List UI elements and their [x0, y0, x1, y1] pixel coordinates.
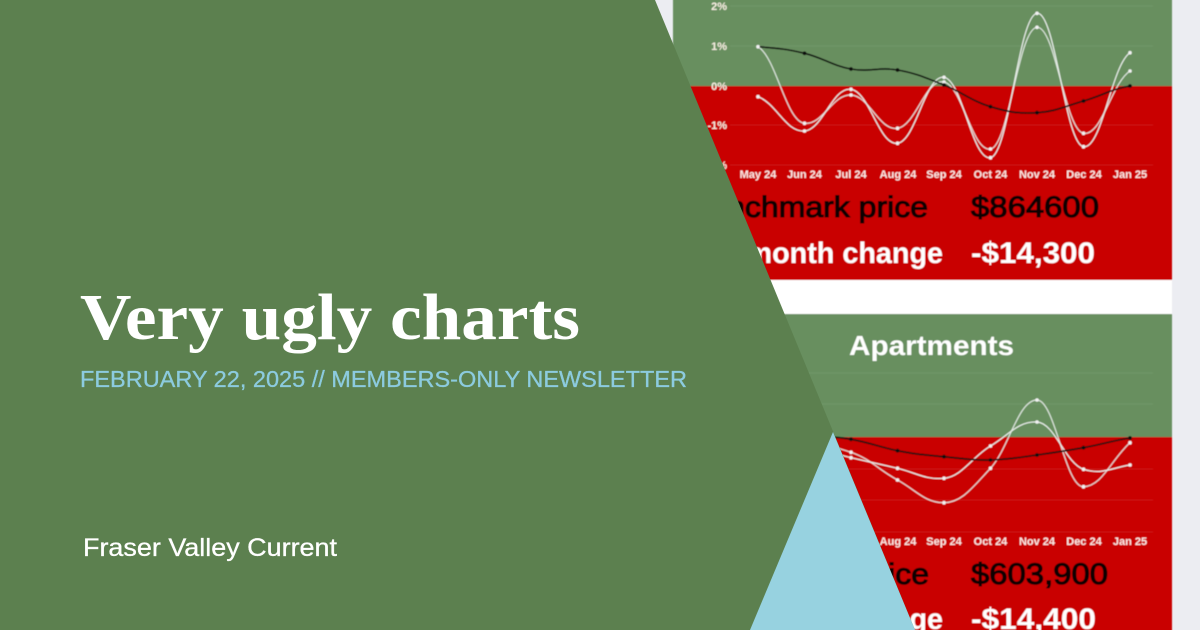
x axis labels: Oct 24 [974, 169, 1008, 181]
x axis labels: Oct 24 [974, 536, 1008, 548]
x axis labels: Dec 24 [1066, 169, 1103, 181]
panel: screenshot of chart cards [673, 0, 1172, 630]
y axis labels: 1% [711, 41, 727, 53]
panel: apartments chart card [673, 314, 1172, 630]
benchmark price row [689, 558, 1108, 591]
y axis labels: 0% [711, 81, 727, 93]
x axis labels: Jun 24 [787, 169, 823, 181]
benchmark price row: $864600 [971, 191, 1099, 224]
x axis labels: Nov 24 [1019, 536, 1056, 548]
x axis labels: Nov 24 [1019, 169, 1056, 181]
month change row [721, 603, 1096, 630]
x axis labels: Aug 24 [880, 536, 917, 548]
benchmark price row [688, 191, 1099, 224]
line chart: top [756, 12, 1132, 160]
y axis labels [707, 1, 727, 172]
x axis labels: May 24 [740, 169, 777, 181]
benchmark price row: Benchmark price [688, 191, 928, 224]
y axis labels: 2% [711, 1, 727, 13]
title: Very ugly charts [80, 281, 580, 354]
heading: Apartments: Apartments [849, 330, 1014, 361]
x axis labels: Dec 24 [1066, 536, 1103, 548]
brand name: Fraser Valley Current [83, 534, 337, 562]
x axis labels: Sep 24 [926, 536, 963, 548]
x axis labels: Sep 24 [926, 169, 963, 181]
x axis labels [880, 536, 1147, 548]
x axis labels: Aug 24 [880, 169, 917, 181]
x axis labels: Jan 25 [1113, 169, 1147, 181]
y axis labels: -1% [707, 120, 727, 132]
line chart: bottom [804, 398, 1132, 505]
dark green angled panel [0, 0, 915, 630]
card backing [673, 0, 1172, 630]
x axis labels [740, 169, 1147, 181]
y axis labels: -2% [707, 160, 727, 172]
panel: detached homes chart card [673, 0, 1172, 280]
light blue triangle [750, 432, 915, 630]
x axis labels: Jan 25 [1113, 536, 1147, 548]
benchmark price row: $603,900 [971, 558, 1108, 591]
month change row: 1-month change [721, 237, 943, 270]
benchmark price row: Benchmark price [689, 558, 929, 591]
x axis labels: Jul 24 [835, 169, 867, 181]
month change row [721, 237, 1095, 270]
month change row: -$14,300 [971, 237, 1095, 270]
subtitle: FEBRUARY 22, 2025 // MEMBERS-ONLY NEWSLETTER [80, 366, 687, 392]
